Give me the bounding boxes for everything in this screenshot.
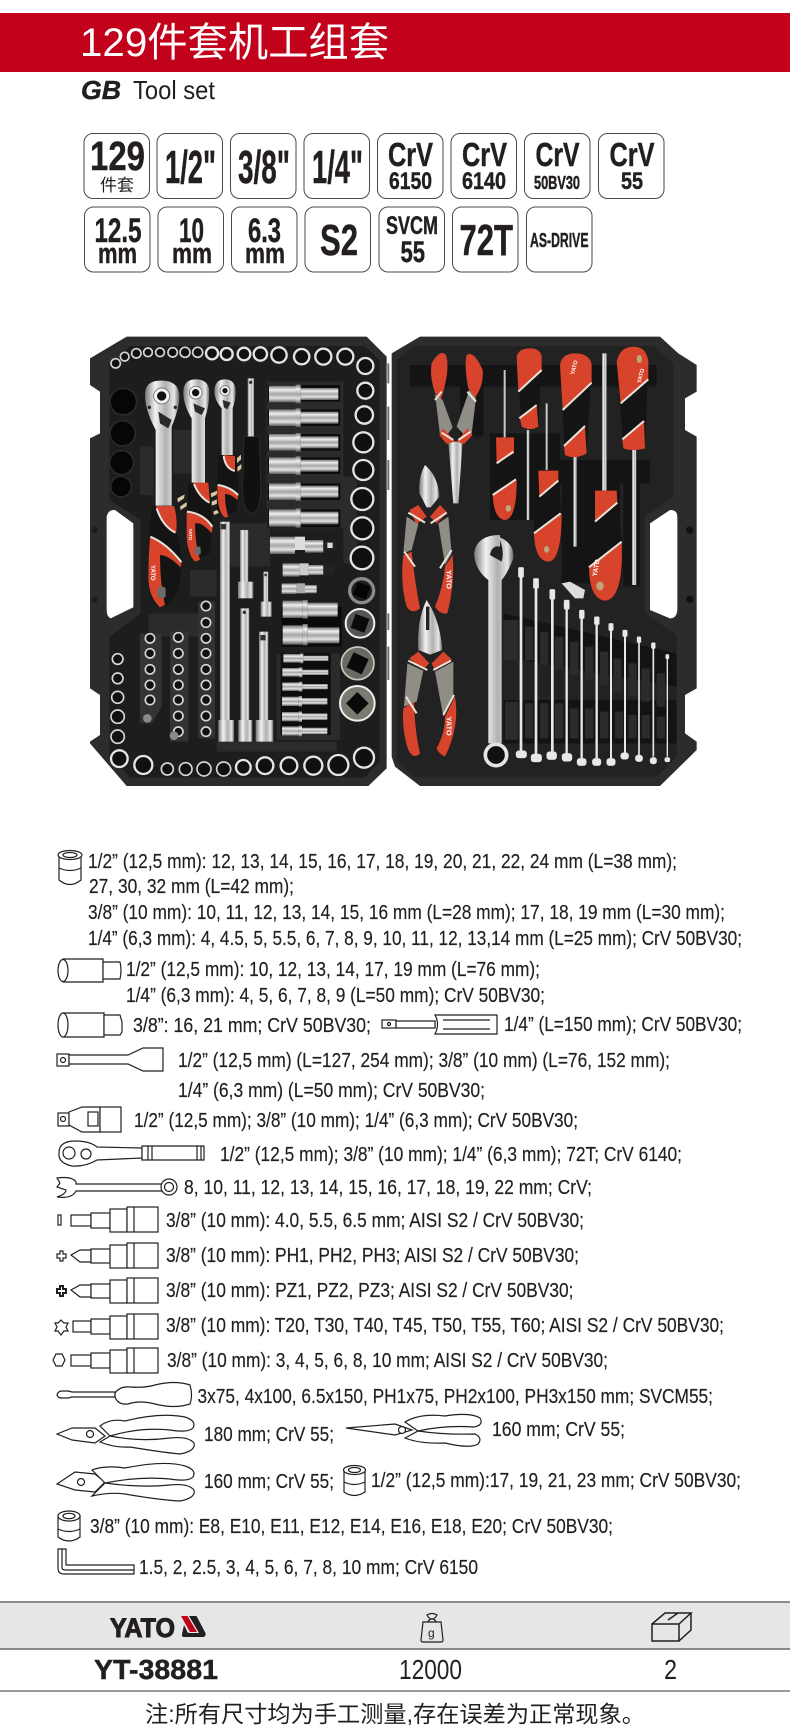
ratchet 3/8 inch [183, 379, 213, 562]
badge: 12.5 mm: mm [98, 238, 137, 270]
icon: flat bit [58, 1207, 158, 1232]
footnote: 注:所有尺寸均为手工测量,存在误差为正常现象。 [145, 1701, 645, 1727]
icon: PZ bit [57, 1278, 158, 1303]
badge: 10 mm [158, 207, 224, 272]
badge: CrV 55: CrV [610, 136, 654, 173]
icon: package box [652, 1613, 691, 1641]
icon: hex key [58, 1549, 134, 1574]
icon: screwdriver [57, 1382, 192, 1406]
large open-ring wrench [474, 535, 513, 766]
diagonal cutters: YATO [445, 570, 454, 589]
quantity value: 2 [664, 1654, 677, 1685]
ratchet 1/2 inch [145, 381, 182, 607]
badge: 1/4 inch: 1/4" [312, 141, 363, 193]
badge: SVCM 55: SVCM [386, 212, 438, 240]
long sockets [269, 385, 338, 528]
screwdrivers [493, 347, 648, 601]
badge: CrV 55: 55 [621, 168, 643, 195]
badge: 1/4 inch [304, 134, 370, 198]
icon: ratchet [59, 1141, 204, 1166]
subtitle [81, 75, 216, 105]
spec badges [84, 133, 664, 272]
badge: 6.3 mm [232, 207, 297, 272]
badge: S2: S2 [320, 216, 358, 265]
text: flat bits: 3/8” (10 mm): 4.0, 5.5, 6.5 mm; AISI S2 / CrV 50BV30; [166, 1210, 584, 1232]
badge: CrV 50BV30 [524, 134, 590, 198]
badge: 6.3 mm: 6.3 [248, 212, 281, 250]
badge: 12.5 mm: 12.5 [94, 212, 142, 250]
icon: combination wrench [57, 1178, 177, 1197]
subtitle: Tool set [133, 75, 216, 105]
weight value: 12000 [399, 1654, 462, 1685]
badge: CrV 6150: 6150 [389, 168, 432, 195]
icon: weight: g [428, 1626, 435, 1640]
panel: left case half [90, 337, 389, 786]
model number: YT-38881 [94, 1654, 218, 1685]
sockets: top row [111, 347, 353, 368]
logo: YATO: YATO [110, 1613, 175, 1643]
text: deep sockets: 1/2” (12,5 mm): 10, 12, 13, 14, 17, 19 mm (L=76 mm); [126, 959, 540, 981]
combination spanners [516, 567, 670, 766]
text: universal joints: 1/2” (12,5 mm); 3/8” (10 mm); 1/4” (6,3 mm); CrV 50BV30; [134, 1110, 578, 1132]
badge: SVCM 55: 55 [400, 236, 425, 269]
badge: 72T: 72T [460, 216, 513, 265]
sockets: right column [340, 358, 375, 768]
badge: CrV 55 [598, 134, 664, 198]
text: ratchets: 1/2” (12,5 mm); 3/8” (10 mm); 1/4” (6,3 mm); 72T; CrV 6140; [220, 1144, 682, 1166]
text: spinner handle spec: 1/4” (L=150 mm); CrV 50BV30; [504, 1014, 742, 1036]
icon: weight [421, 1614, 443, 1642]
diagonal cutters [402, 465, 454, 614]
combination pliers [403, 600, 456, 757]
icon: E-socket [58, 1511, 80, 1541]
icon: extension bar [57, 1048, 163, 1071]
icon: spinner handle [382, 1015, 497, 1034]
icon: bit socket [58, 1013, 122, 1037]
title: 129件套机工组套 [80, 21, 389, 65]
panel: right case half [392, 337, 697, 786]
text: 16, 21 mm: 3/8”: 16, 21 mm; CrV 50BV30; [133, 1015, 371, 1037]
icon: universal joint [58, 1107, 121, 1132]
icon: deep socket [58, 959, 121, 982]
spinner handle [243, 378, 261, 513]
badge: 12.5 mm [84, 207, 150, 272]
badge: CrV 50BV30: CrV [536, 136, 580, 173]
badge: CrV 6140: CrV [462, 136, 507, 173]
text: screwdrivers: 3x75, 4x100, 6.5x150, PH1x75, PH2x100, PH3x150 mm; SVCM55; [198, 1386, 713, 1408]
icon: socket [58, 850, 82, 884]
text: 1/2 sockets: 1/2” (12,5 mm):17, 19, 21, 23 mm; CrV 50BV30; [371, 1470, 741, 1492]
badge: AS-DRIVE: AS-DRIVE [530, 230, 588, 252]
needle-nose pliers [431, 353, 483, 503]
badge: 129 pieces: 129 [90, 133, 145, 179]
icon: needle-nose pliers [346, 1414, 481, 1446]
icon: PH bit [57, 1243, 158, 1268]
text: 160 mm needle: 160 mm; CrV 55; [492, 1419, 625, 1441]
text: sockets 12.5: 1/2” (12,5 mm): 12, 13, 14, 15, 16, 17, 18, 19, 20, 21, 22, 24 mm (L=38 mm); [88, 851, 677, 873]
badge: 6.3 mm: mm [245, 238, 285, 270]
badge: 3/8 inch: 3/8" [238, 141, 290, 193]
badge: CrV 6140: 6140 [462, 168, 506, 195]
text: 160 mm cutters: 160 mm; CrV 55; [204, 1471, 334, 1493]
text: hex bits: 3/8” (10 mm): 3, 4, 5, 6, 8, 10 mm; AISI S2 / CrV 50BV30; [167, 1350, 608, 1372]
ratchet 3/8 inch: YATO [188, 528, 193, 541]
brass bits behind ratchets [177, 455, 241, 515]
badge: 129 pieces: 件套 [100, 176, 134, 195]
badge: 10 mm: mm [172, 238, 212, 270]
screwdrivers: YATO [592, 559, 602, 577]
text: PH bits: 3/8” (10 mm): PH1, PH2, PH3; AISI S2 / CrV 50BV30; [166, 1245, 579, 1267]
icon: combination pliers [57, 1415, 194, 1454]
table: product data [0, 1602, 790, 1692]
text: Torx bits: 3/8” (10 mm): T20, T30, T40, T45, T50, T55, T60; AISI S2 / CrV 50BV30; [166, 1315, 724, 1337]
header banner [0, 13, 790, 72]
table header band [0, 1602, 790, 1649]
icon: Torx bit [55, 1314, 158, 1339]
table row separator [0, 1690, 790, 1692]
parts list [53, 850, 742, 1579]
text: E sockets: 3/8” (10 mm): E8, E10, E11, E12, E14, E16, E18, E20; CrV 50BV30; [90, 1516, 613, 1538]
subtitle: GB [81, 75, 121, 105]
badge: CrV 6140 [451, 134, 516, 198]
text: wrenches: 8, 10, 11, 12, 13, 14, 15, 16, 17, 18, 19, 22 mm; CrV; [184, 1177, 592, 1199]
black impact sockets [110, 388, 137, 497]
text: PZ bits: 3/8” (10 mm): PZ1, PZ2, PZ3; AISI S2 / CrV 50BV30; [166, 1280, 574, 1302]
badge: 129 pieces [84, 133, 150, 198]
badge: AS-DRIVE [526, 207, 592, 272]
badge: S2 [305, 207, 370, 272]
text: deep sockets 6.3: 1/4” (6,3 mm): 4, 5, 6, 7, 8, 9 (L=50 mm); CrV 50BV30; [126, 985, 545, 1007]
text: extension bars: 1/2” (12,5 mm) (L=127, 254 mm); 3/8” (10 mm) (L=76, 152 mm); [178, 1050, 670, 1072]
combination pliers: YATO [445, 717, 454, 736]
badge: 72T [452, 207, 518, 272]
text: 180 mm: 180 mm; CrV 55; [204, 1424, 334, 1446]
badge: 1/2 inch [157, 134, 222, 198]
text: hex keys: 1.5, 2, 2.5, 3, 4, 5, 6, 7, 8, 10 mm; CrV 6150 [139, 1557, 478, 1579]
ratchet 1/2 inch: YATO [149, 565, 155, 581]
badge: 3/8 inch [230, 134, 296, 198]
deep sockets 1/4 inch [282, 653, 328, 736]
sockets: left column [111, 654, 124, 743]
screwdrivers: YATO [637, 368, 647, 384]
product photo: open tool case [90, 337, 697, 786]
text: sockets 12.5 long: 27, 30, 32 mm (L=42 mm); [89, 876, 294, 898]
screwdriver bits [140, 601, 215, 742]
icon: diagonal cutters [57, 1463, 194, 1501]
badge: CrV 6150 [378, 134, 443, 198]
text: extension bars 6.3: 1/4” (6,3 mm) (L=50 mm); CrV 50BV30; [178, 1080, 485, 1102]
badge: CrV 6150: CrV [388, 136, 433, 173]
icon: socket 1/2 [344, 1466, 366, 1496]
universal joints [270, 537, 337, 594]
badge: 10 mm: 10 [179, 212, 204, 250]
ratchet 1/4 inch [214, 379, 238, 518]
badge: 1/2 inch: 1/2" [165, 141, 216, 193]
deep sockets 3/8 inch [283, 600, 339, 645]
badge: CrV 50BV30: 50BV30 [534, 173, 580, 193]
sockets: bottom row [111, 750, 348, 776]
screwdrivers: YATO [570, 359, 580, 376]
extension bars [218, 522, 273, 742]
icon: hex bit [53, 1348, 158, 1373]
badge: SVCM 55 [379, 207, 444, 272]
